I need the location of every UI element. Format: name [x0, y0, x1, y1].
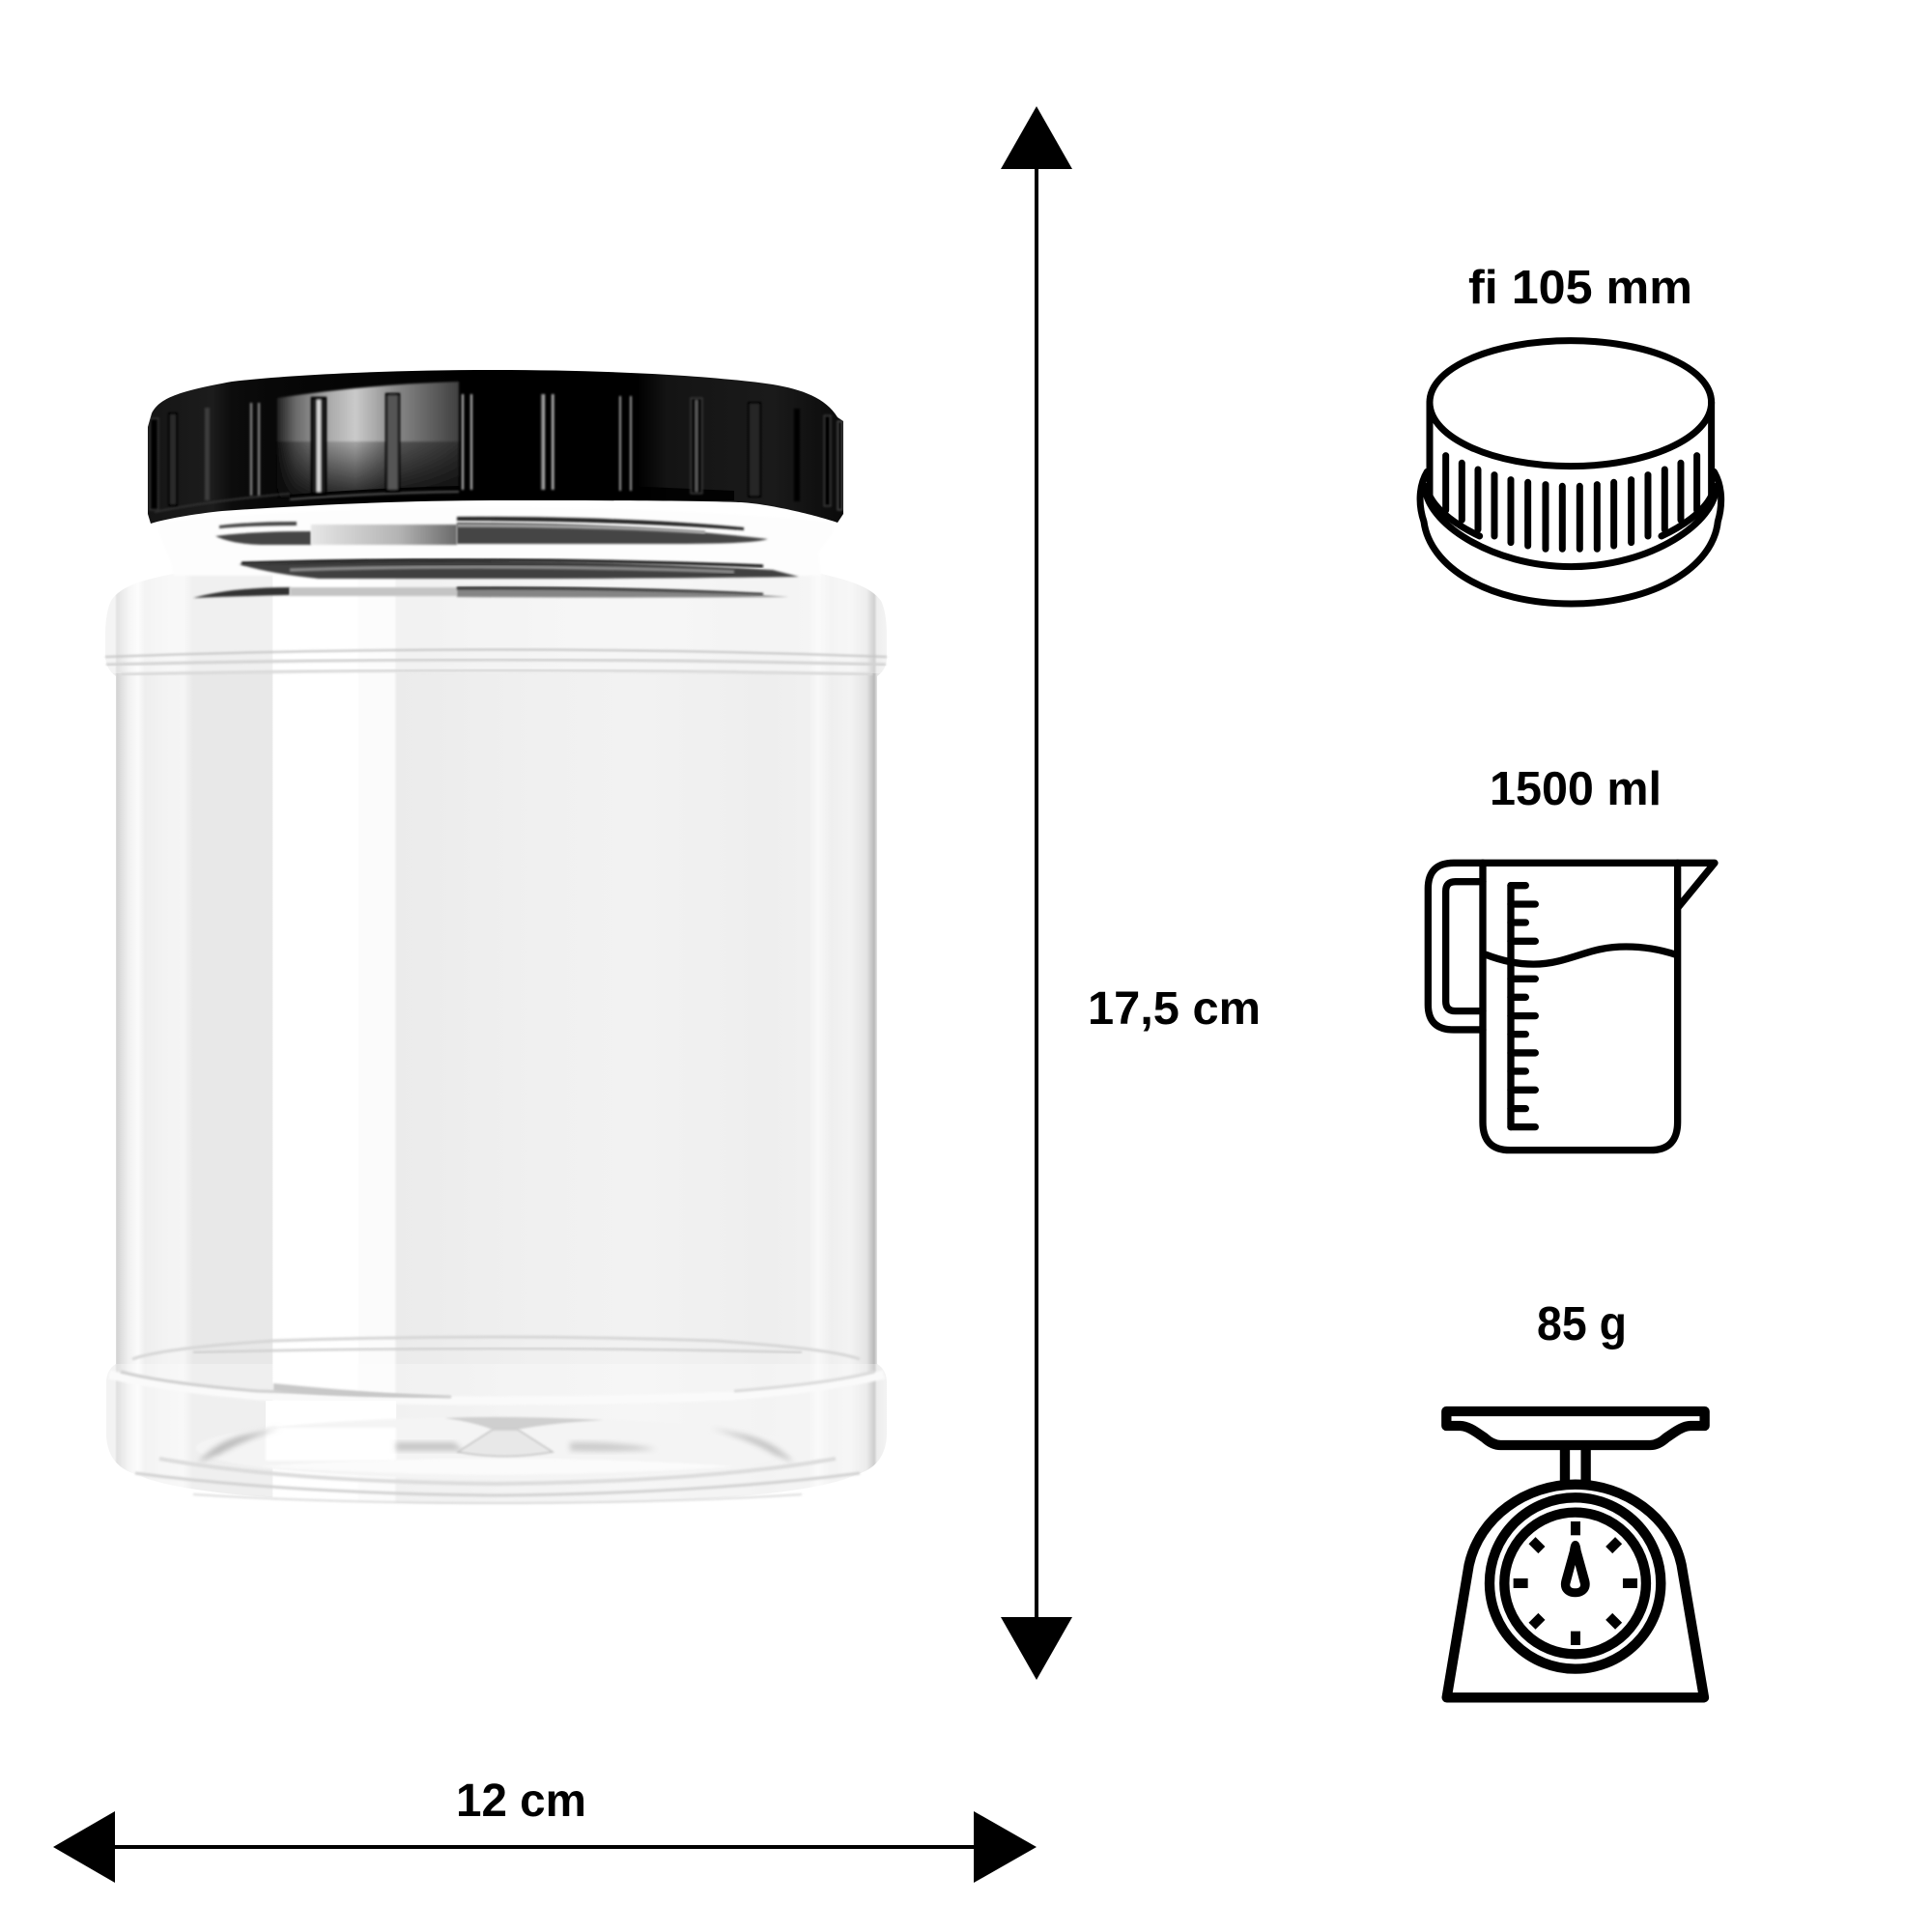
jar with black lid: [97, 367, 898, 1512]
icon: measuring jug: [1428, 863, 1715, 1151]
label: height: 17,5 cm: [1088, 983, 1261, 1035]
icon: kitchen scale: [1446, 1411, 1705, 1697]
icon: lid: [1420, 341, 1721, 604]
black lid: [145, 367, 850, 526]
jar base: [109, 1337, 884, 1503]
arrow: jar height: [1001, 106, 1072, 1680]
label: lid diameter: fi 105 mm: [1468, 262, 1692, 314]
jar body: [97, 565, 898, 1512]
jar neck: [159, 507, 833, 598]
arrow: jar width: [53, 1811, 1037, 1883]
label: capacity: 1500 ml: [1490, 763, 1662, 815]
lid highlight: [277, 382, 459, 497]
label: width: 12 cm: [456, 1776, 586, 1827]
lid ribs: [150, 394, 842, 510]
label: weight: 85 g: [1537, 1298, 1627, 1350]
